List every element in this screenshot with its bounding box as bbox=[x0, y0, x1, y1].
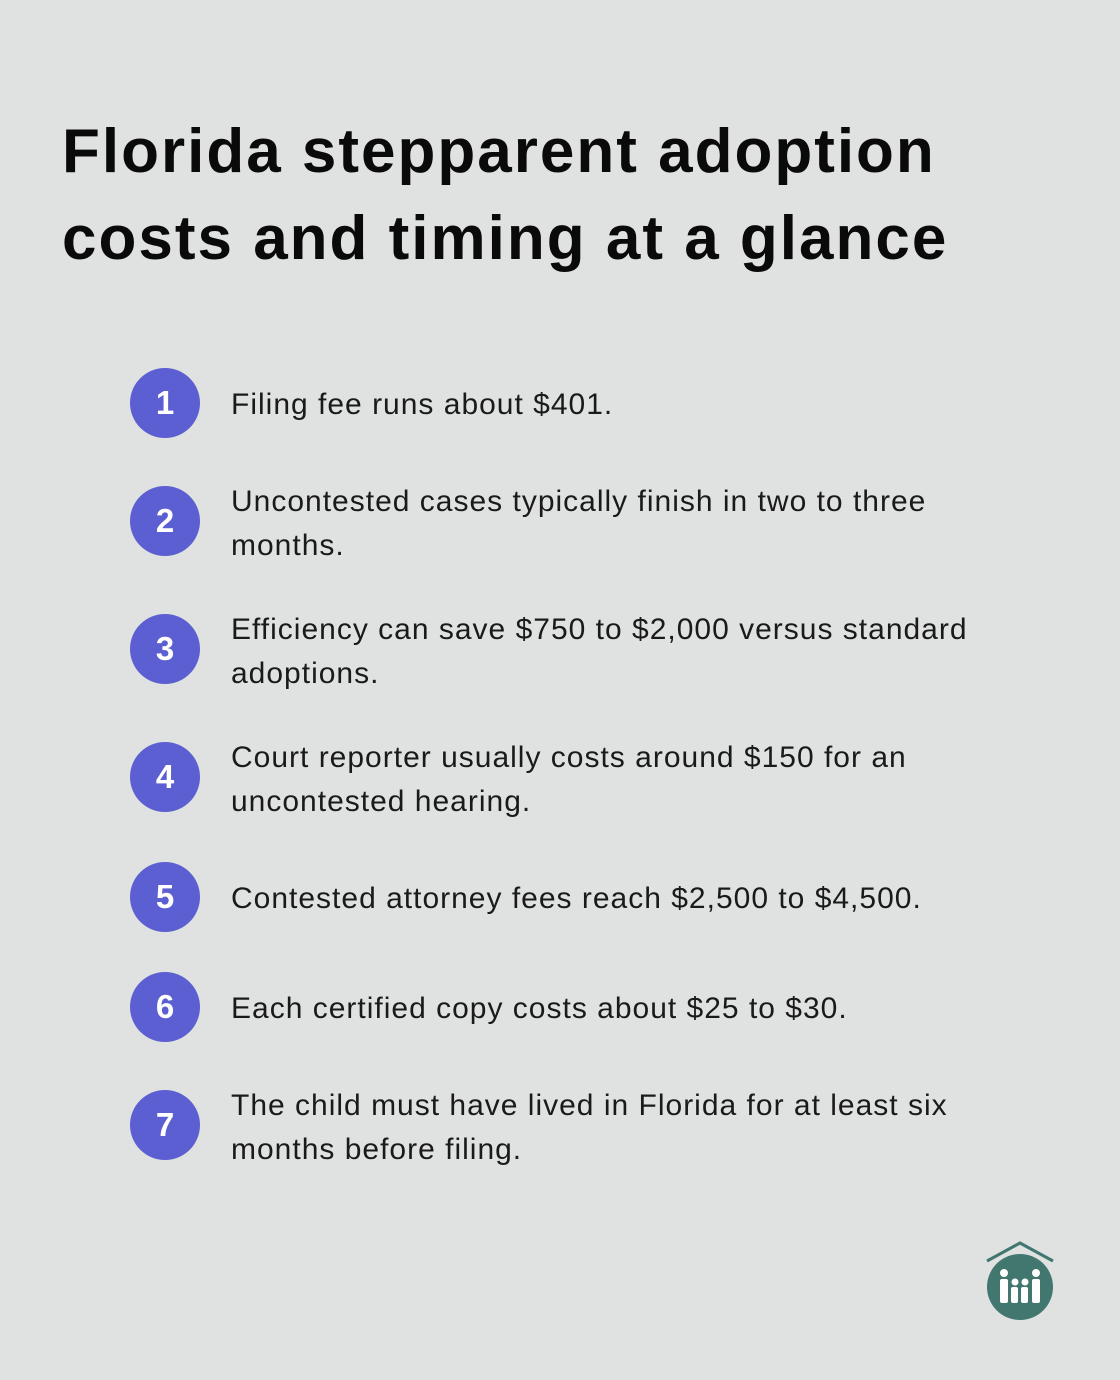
item 1: Filing fee runs about $401. bbox=[231, 388, 613, 421]
item 3: Efficiency can save $750 to $2,000 versus standard adoptions. bbox=[231, 613, 968, 690]
item 6 bbox=[130, 972, 848, 1042]
item 1: 1 bbox=[156, 384, 174, 421]
item 6: 6 bbox=[156, 988, 174, 1025]
title: Florida stepparent adoption bbox=[62, 117, 936, 186]
item 7: The child must have lived in Florida for at least six months before filing. bbox=[231, 1089, 948, 1166]
item 4: 4 bbox=[156, 758, 174, 795]
title: costs and timing at a glance bbox=[62, 204, 948, 273]
item 5: Contested attorney fees reach $2,500 to $4,500. bbox=[231, 882, 922, 915]
item 2: Uncontested cases typically finish in two to three months. bbox=[231, 485, 926, 562]
title bbox=[62, 117, 948, 273]
icon: logo bbox=[986, 1241, 1054, 1320]
item 1 bbox=[130, 368, 613, 438]
item 4: Court reporter usually costs around $150 for an uncontested hearing. bbox=[231, 741, 907, 818]
item 2: 2 bbox=[156, 502, 174, 539]
item 5 bbox=[130, 862, 922, 932]
item 5: 5 bbox=[156, 878, 174, 915]
item 7: 7 bbox=[156, 1106, 174, 1143]
item 3: 3 bbox=[156, 630, 174, 667]
item 6: Each certified copy costs about $25 to $30. bbox=[231, 992, 848, 1025]
